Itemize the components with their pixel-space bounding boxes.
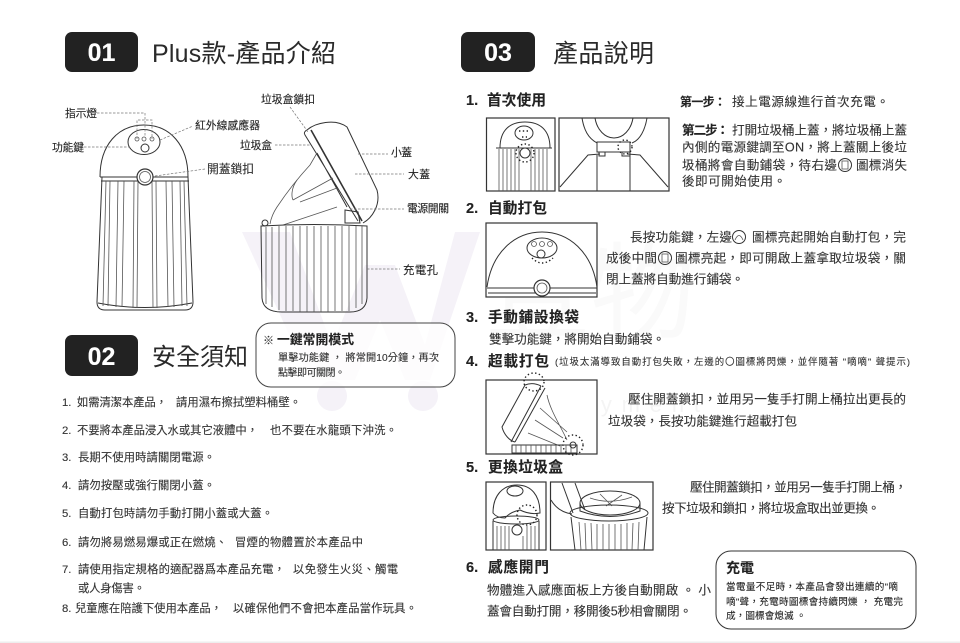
note: (垃圾太滿導致自動打包失敗，左邊的〇圖標將閃爍，並伴隨著 "嘀嘀" 聲提示) — [555, 356, 910, 367]
label: 充電孔: 充電孔 — [403, 264, 438, 277]
item 6: 6. — [62, 537, 71, 549]
label: 大蓋: 大蓋 — [408, 167, 430, 181]
heading: 超載打包 — [488, 352, 549, 370]
callout: one-key open mode: 點擊即可關閉。 — [278, 366, 345, 379]
label: 電源開關: 電源開關 — [407, 201, 449, 215]
callout: one-key open mode: ※ — [263, 335, 274, 347]
illustration: pull out bag — [486, 373, 597, 455]
description text: 壓住開蓋鎖扣，並用另一隻手打開上桶拉出更長的 — [628, 392, 906, 406]
item 8 — [62, 601, 417, 615]
callout: charging: 充電 — [726, 560, 754, 576]
description text: 雙擊功能鍵，將開始自動鋪袋。 — [489, 332, 665, 346]
heading — [466, 558, 549, 576]
heading: 5. — [466, 460, 478, 476]
item 3: 3. — [62, 452, 71, 464]
section 1: first use — [466, 91, 907, 191]
illustration: box removal — [550, 482, 653, 550]
item 8: 兒童應在陪護下使用本產品， — [75, 601, 222, 615]
panel: open bin view — [240, 92, 449, 312]
label: 垃圾盒鎖扣: 垃圾盒鎖扣 — [261, 92, 315, 106]
description text: 長按功能鍵，左邊 — [630, 230, 732, 244]
description text: 壓住開蓋鎖扣，並用另一隻手打開上桶， — [690, 480, 907, 494]
item 7: 7. — [62, 564, 71, 576]
item 6: 冒煙的物體置於本產品中 — [235, 535, 363, 549]
description text: 閉上蓋將自動進行鋪袋。 — [606, 272, 744, 286]
heading 03: 03 — [484, 39, 512, 67]
item 6: 請勿將易燃易爆或正在燃燒、 — [78, 535, 227, 549]
item 1 — [62, 395, 301, 409]
label: 紅外線感應器: 紅外線感應器 — [195, 118, 260, 132]
description text: 成後中間 — [606, 252, 657, 266]
section 3: replace bag — [466, 308, 665, 346]
item 2 — [62, 423, 397, 437]
item 4: 請勿按壓或強行關閉小蓋。 — [78, 478, 215, 492]
item 7: 請使用指定規格的適配器爲本產品充電， — [78, 562, 285, 576]
item 1: 請用濕布擦拭塑料桶壁。 — [176, 395, 301, 409]
heading: 4. — [466, 354, 478, 370]
heading — [466, 199, 547, 217]
heading 01 — [65, 32, 336, 72]
item 3: 長期不使用時請關閉電源。 — [78, 450, 215, 464]
heading: 1. — [466, 93, 478, 109]
step 1 text: 第一步： — [680, 94, 726, 109]
heading: 2. — [466, 201, 478, 217]
illustration: bin lock — [486, 118, 555, 191]
item 6 — [62, 535, 363, 549]
heading 03: 產品說明 — [553, 40, 654, 68]
heading 03 — [461, 32, 654, 72]
step 2 text: 後即可開始使用。 — [682, 174, 786, 188]
item 5: 自動打包時請勿手動打開小蓋或大蓋。 — [78, 506, 273, 520]
callout: one-key open mode — [256, 323, 455, 387]
illustration: control panel — [486, 223, 597, 297]
description text: 垃圾袋，長按功能鍵進行超載打包 — [608, 414, 797, 428]
description text — [487, 582, 711, 618]
step 2 text: 圾桶將會自動鋪袋，待右邊 — [682, 158, 837, 172]
item 1: 1. — [62, 397, 71, 409]
heading: 更換垃圾盒 — [488, 458, 563, 476]
watermark: enjoyment — [520, 392, 700, 417]
description text — [662, 480, 907, 516]
item 5: 5. — [62, 508, 71, 520]
heading: 首次使用 — [487, 91, 546, 109]
step 2 text: 打開垃圾桶上蓋，將垃圾桶上蓋 — [732, 124, 907, 138]
item 7 continued: 或人身傷害。 — [78, 581, 145, 595]
panel: front view of bin — [52, 106, 260, 310]
section 6: sensor open — [466, 558, 711, 618]
heading 01: 01 — [88, 39, 115, 67]
step 2 text — [682, 122, 907, 188]
heading 02: 安全須知 — [152, 344, 248, 371]
label: 小蓋: 小蓋 — [391, 146, 412, 159]
label: 功能鍵: 功能鍵 — [52, 140, 84, 154]
label: 垃圾盒: 垃圾盒 — [240, 138, 272, 152]
step 1 text: 接上電源線進行首次充電。 — [732, 94, 889, 109]
item 2: 也不要在水龍頭下沖洗。 — [270, 423, 397, 437]
heading — [466, 352, 549, 370]
heading: 6. — [466, 560, 478, 576]
item 2: 2. — [62, 425, 71, 437]
heading — [466, 458, 563, 476]
heading: 手動鋪設換袋 — [488, 308, 579, 326]
item 2: 不要將本產品浸入水或其它液體中， — [77, 423, 258, 437]
item 7 — [62, 562, 398, 576]
step 2 text: 圖標消失 — [856, 158, 907, 172]
illustration: open bin — [261, 107, 404, 312]
heading: 自動打包 — [488, 199, 547, 217]
heading 02 — [65, 335, 248, 376]
description text: 蓋會自動打開，移開後5秒相會關閉。 — [487, 604, 692, 618]
step 2 text: 內側的電源鍵調至ON，將上蓋關上後垃 — [682, 140, 907, 154]
section 5: replace box — [466, 458, 907, 550]
description text — [608, 392, 906, 428]
watermark — [242, 232, 700, 417]
description text: 圖標亮起，即可開啟上蓋拿取垃圾袋，關 — [675, 250, 906, 266]
callout: charging: 嘀"聲，充電時圖標會持續閃爍 ， 充電完 — [726, 596, 903, 608]
heading: 感應開門 — [488, 558, 549, 576]
heading 02: 02 — [88, 343, 115, 371]
callout: charging: 成，圖標會熄滅 。 — [726, 610, 806, 622]
illustration: box lock — [486, 482, 546, 550]
item 8: 以確保他們不會把本產品當作玩具。 — [233, 601, 417, 615]
callout: one-key open mode: 一鍵常開模式 — [277, 332, 354, 347]
label: 指示燈: 指示燈 — [65, 106, 97, 120]
description text: 按下垃圾和鎖扣，將垃圾盒取出並更換。 — [662, 500, 880, 516]
item 7: 以免發生火災、觸電 — [293, 562, 398, 576]
callout: charging: 當電量不足時，本產品會發出連續的"嘀 — [726, 581, 898, 593]
callout: one-key open mode: 單擊功能鍵 ， 將常開10分鐘，再次 — [278, 351, 439, 364]
section 2: auto pack — [466, 199, 906, 297]
description text: 圖標亮起開始自動打包，完 — [752, 230, 906, 244]
description text: 物體進入感應面板上方後自動開啟 。 小 — [487, 582, 711, 598]
label: 開蓋鎖扣: 開蓋鎖扣 — [207, 162, 254, 176]
heading — [466, 91, 546, 109]
heading: 3. — [466, 310, 478, 326]
section 4: overload pack — [466, 352, 910, 455]
step 2 text: 第二步： — [682, 122, 729, 138]
safety list — [62, 395, 417, 615]
item 4: 4. — [62, 480, 71, 492]
watermark: 壹物 — [485, 236, 695, 353]
callout: charging — [716, 551, 916, 629]
heading 01: Plus款-產品介紹 — [152, 40, 336, 68]
item 8: 8. — [62, 603, 71, 615]
illustration: power switch — [559, 118, 669, 191]
description text — [606, 230, 906, 286]
item 1: 如需清潔本產品， — [77, 395, 167, 409]
illustration: closed bin — [84, 113, 205, 310]
